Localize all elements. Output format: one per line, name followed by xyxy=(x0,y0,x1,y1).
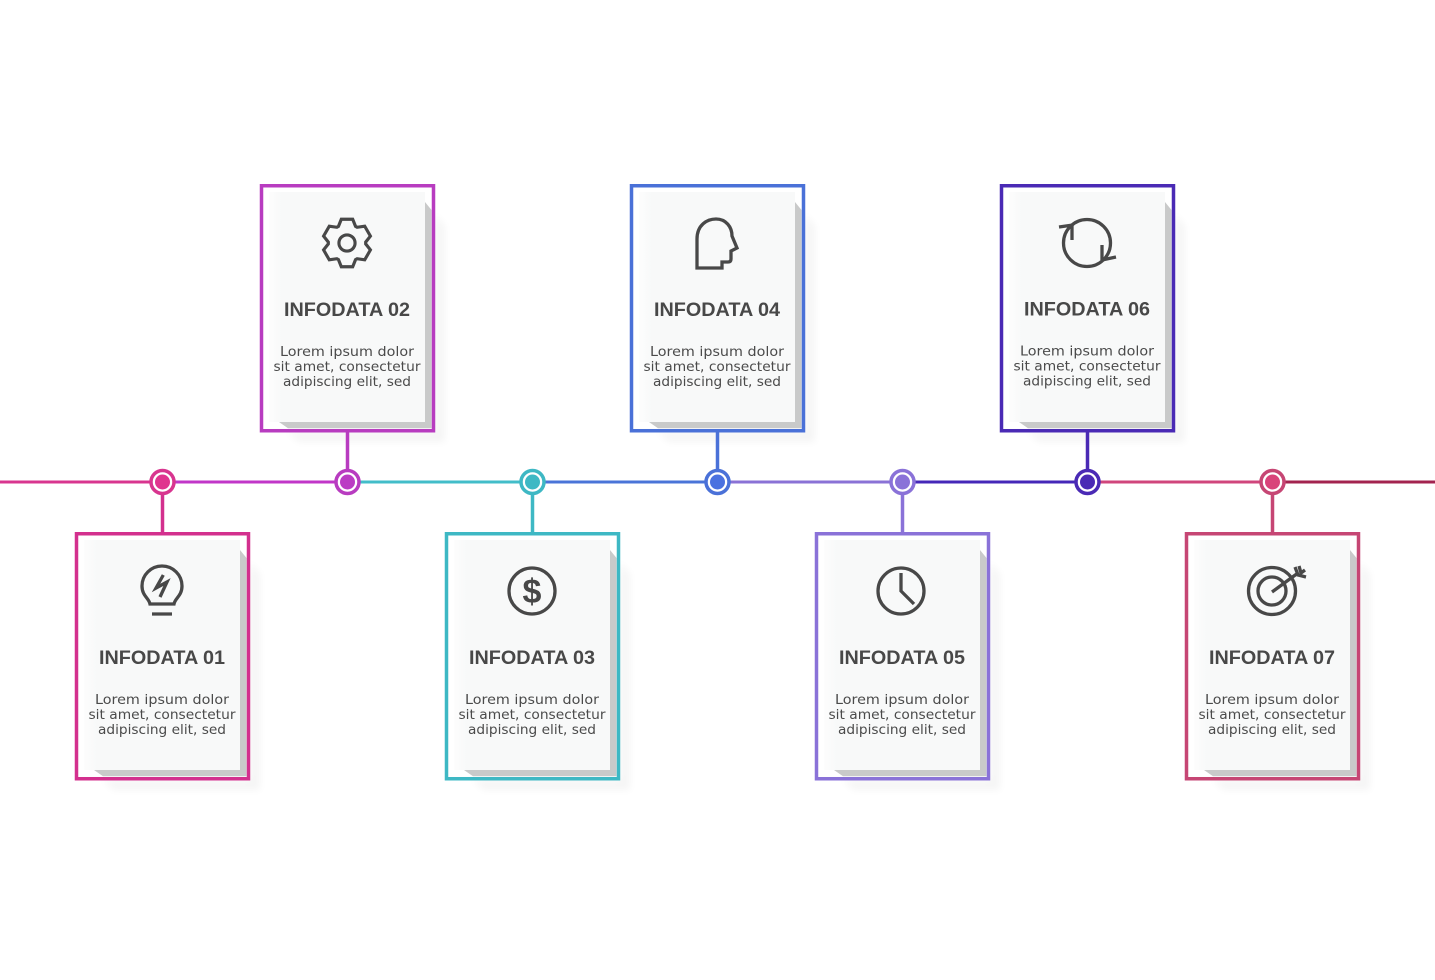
text block 06 xyxy=(1014,344,1161,390)
icon: head profile xyxy=(697,219,737,268)
heading: infodata 05: INFODATA 05 xyxy=(839,647,965,669)
text block 05 xyxy=(828,692,976,738)
text block 06: sit amet, consectetur xyxy=(1014,358,1161,374)
heading: infodata 03: INFODATA 03 xyxy=(469,647,595,669)
text block 07: sit amet, consectetur xyxy=(1198,707,1346,723)
text block 02: Lorem ipsum dolor xyxy=(280,344,414,360)
text block 03: sit amet, consectetur xyxy=(458,707,606,723)
icon: gear xyxy=(324,219,370,267)
icon: clock xyxy=(878,568,924,614)
card 06 xyxy=(1002,186,1185,470)
text block 06: Lorem ipsum dolor xyxy=(1020,344,1154,360)
text block 01: Lorem ipsum dolor xyxy=(95,692,229,708)
icon: dollar coin: $ xyxy=(523,573,542,611)
text block 04: sit amet, consectetur xyxy=(644,359,791,375)
text block 05: adipiscing elit, sed xyxy=(838,722,966,738)
card 03 xyxy=(446,494,630,790)
text block 04: Lorem ipsum dolor xyxy=(650,344,784,360)
text block 01 xyxy=(88,692,236,738)
heading: infodata 01: INFODATA 01 xyxy=(99,647,225,669)
text block 02 xyxy=(274,344,421,390)
icon: refresh arrows xyxy=(1059,220,1116,266)
text block 03: adipiscing elit, sed xyxy=(468,722,596,738)
card 07 xyxy=(1186,494,1370,790)
timeline nodes xyxy=(151,470,1284,494)
card 05 xyxy=(816,494,1000,790)
text block 04 xyxy=(644,344,791,390)
card 02 xyxy=(262,186,445,470)
text block 04: adipiscing elit, sed xyxy=(653,374,781,390)
heading: infodata 04: INFODATA 04 xyxy=(654,299,780,321)
text block 01: sit amet, consectetur xyxy=(88,707,236,723)
card 04 xyxy=(632,186,815,470)
card 01 xyxy=(76,494,260,790)
icon: target with arrow xyxy=(1248,566,1306,614)
text block 07 xyxy=(1198,692,1346,738)
text block 07: Lorem ipsum dolor xyxy=(1205,692,1339,708)
heading: infodata 06: INFODATA 06 xyxy=(1024,298,1150,320)
icon: dollar coin xyxy=(509,568,555,614)
icon: light bulb xyxy=(142,566,182,614)
heading: infodata 02: INFODATA 02 xyxy=(284,299,410,321)
text block 05: sit amet, consectetur xyxy=(828,707,976,723)
text block 02: adipiscing elit, sed xyxy=(283,374,411,390)
text block 03: Lorem ipsum dolor xyxy=(465,692,599,708)
text block 05: Lorem ipsum dolor xyxy=(835,692,969,708)
text block 02: sit amet, consectetur xyxy=(274,359,421,375)
text block 06: adipiscing elit, sed xyxy=(1023,374,1151,390)
text block 03 xyxy=(458,692,606,738)
text block 01: adipiscing elit, sed xyxy=(98,722,226,738)
timeline line xyxy=(0,480,1435,484)
heading: infodata 07: INFODATA 07 xyxy=(1209,647,1335,669)
text block 07: adipiscing elit, sed xyxy=(1208,722,1336,738)
